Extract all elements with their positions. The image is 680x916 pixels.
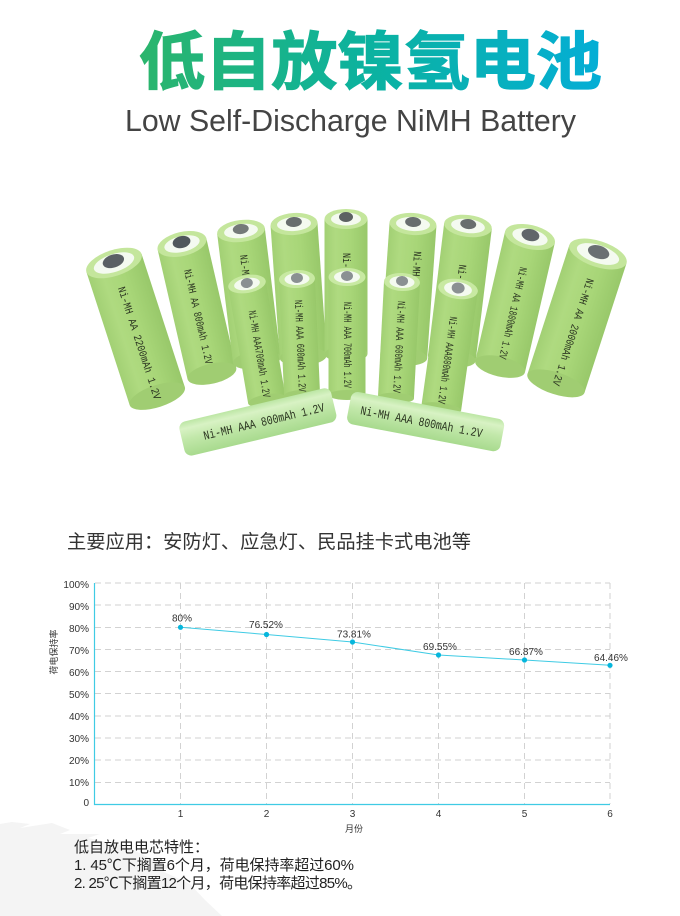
battery: AA 1800mAh: [473, 220, 558, 382]
battery: AAA 800mAh upright back: Ni-MH AA 800mAh 1.2V: [180, 268, 214, 366]
data labels: 64.46%: [594, 653, 628, 664]
battery: back row 3: [216, 217, 282, 372]
battery: back row 7: Ni-MH: [452, 264, 467, 290]
y axis labels: 50%: [69, 690, 89, 701]
x axis title: 月份: [345, 823, 363, 834]
battery: AAA 800mAh front right: Ni-MH AAA800mAh 1.2V: [434, 316, 458, 405]
x axis labels: 3: [350, 809, 356, 820]
title: 低自放镍氢电池: [139, 12, 602, 103]
battery: AA 1800mAh: Ni-MH AA 1800mAh 1.2V: [495, 266, 528, 360]
battery: lying left AAA 800mAh: Ni-MH AAA 800mAh 1.2V: [202, 401, 326, 444]
data labels: [172, 614, 628, 664]
characteristics note: 低自放电电芯特性：: [74, 839, 209, 856]
battery: lying right AAA 800mAh: [346, 391, 505, 452]
x axis labels: 1: [178, 809, 184, 820]
x axis labels: 4: [436, 809, 442, 820]
battery group photo: [82, 209, 631, 457]
battery: back row 6: Ni-MH: [408, 251, 422, 277]
y axis labels: 0: [83, 798, 89, 809]
battery: AAA 600mAh front right: Ni-MH AAA 600mAh 1.2V: [389, 301, 406, 393]
y axis labels: 60%: [69, 668, 89, 679]
battery: AAA 700mAh front: [227, 272, 287, 409]
line chart: charge retention: [48, 580, 628, 834]
subtitle: Low Self-Discharge NiMH Battery: [125, 103, 576, 138]
battery: back row 7: [427, 212, 493, 370]
y axis labels: 100%: [63, 580, 89, 591]
data labels: 73.81%: [337, 630, 371, 640]
characteristics note: [74, 839, 362, 892]
characteristics note: 1. 45℃下搁置6个月，荷电保持率超过60%: [74, 857, 354, 874]
y axis labels: [63, 580, 89, 809]
x axis labels: 2: [264, 809, 270, 820]
y axis labels: 40%: [69, 712, 89, 723]
x axis labels: 6: [607, 809, 613, 820]
y axis labels: 10%: [69, 778, 89, 789]
background brush texture: [0, 822, 222, 916]
battery: AAA 700mAh front: Ni-MH AAA700mAh 1.2V: [245, 310, 271, 399]
battery: AAA 600mAh front: Ni-MH AAA 600mAh 1.2V: [291, 300, 307, 392]
data line: [180, 627, 610, 665]
battery: back row 6: [380, 211, 437, 367]
battery: AA 2200mAh: Ni-MH AA 2200mAh 1.2V: [114, 286, 162, 402]
characteristics note: 2. 25℃下搁置12个月，荷电保持率超过85%。: [74, 875, 362, 892]
x axis labels: [178, 809, 613, 820]
battery: AAA 700mAh front center: Ni-MH AAA 700mAh 1.2V: [340, 302, 352, 388]
battery: AAA 800mAh front right: [421, 276, 479, 416]
data labels: 69.55%: [423, 642, 457, 653]
y axis labels: 30%: [69, 734, 89, 745]
battery: AA 2200mAh: [82, 242, 188, 416]
data labels: 66.87%: [509, 647, 543, 658]
data labels: 80%: [172, 614, 192, 624]
y axis labels: 70%: [69, 646, 89, 657]
battery: AA 2000mAh: [524, 232, 631, 403]
x axis labels: 5: [522, 809, 528, 820]
data points: [178, 625, 613, 668]
applications heading: 主要应用：安防灯、应急灯、民品挂卡式电池等: [67, 531, 471, 553]
battery: AAA 600mAh front: [279, 269, 320, 401]
battery: AAA 700mAh front center: [328, 268, 366, 400]
battery: back row 3: Ni-MH: [236, 254, 251, 281]
battery: AA 2000mAh: Ni-MH AA 2000mAh 1.2V: [549, 277, 595, 387]
battery: back row 5: [324, 209, 368, 362]
battery: back row 4: [270, 211, 327, 367]
y axis labels: 90%: [69, 602, 89, 613]
data labels: 76.52%: [249, 620, 283, 631]
y axis labels: 80%: [69, 624, 89, 635]
battery: lying right AAA 800mAh: Ni-MH AAA 800mAh 1.2V: [359, 404, 484, 441]
battery: AAA 800mAh upright back: [155, 227, 239, 389]
y axis labels: 20%: [69, 756, 89, 767]
battery: lying left AAA 800mAh: [178, 387, 338, 457]
y axis title: 荷电保持率: [48, 629, 59, 675]
battery: back row 5: Ni-MH: [339, 253, 351, 278]
battery: AAA 600mAh front right: [378, 272, 420, 404]
